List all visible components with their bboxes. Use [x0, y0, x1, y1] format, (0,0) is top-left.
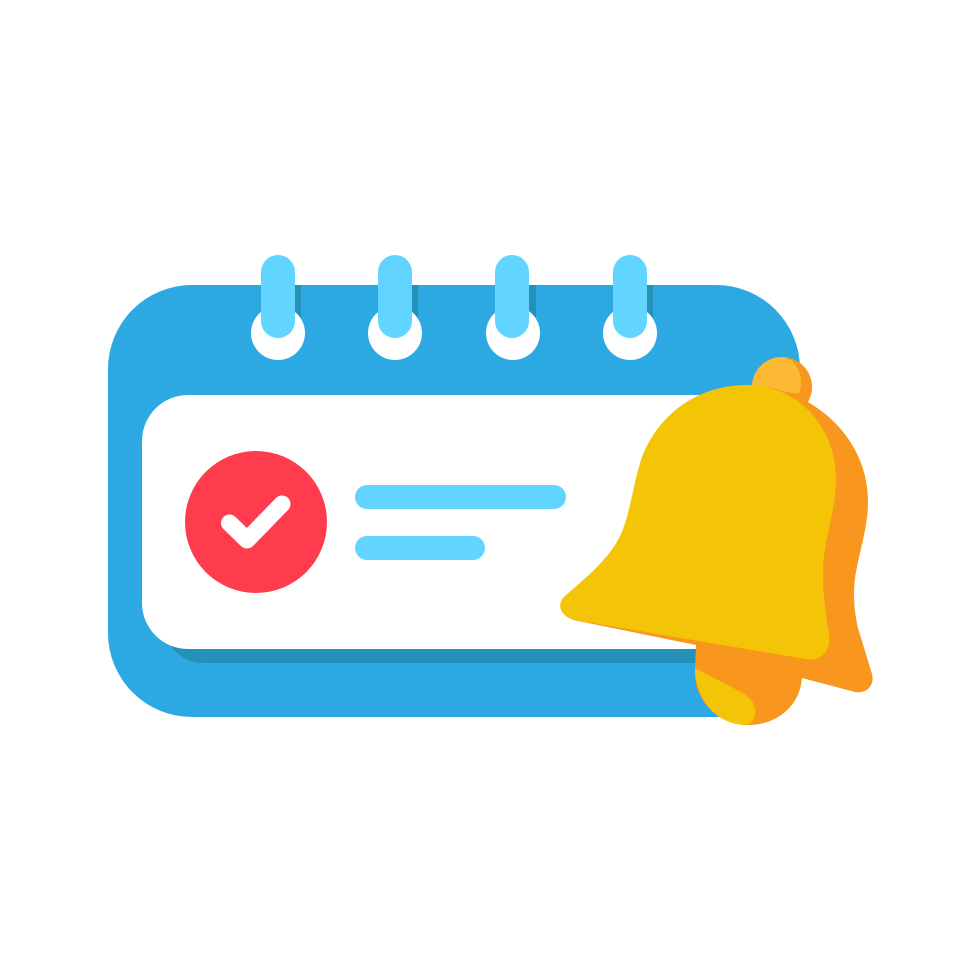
- bell clapper highlight: [695, 668, 755, 725]
- icon: notification bell: [560, 357, 873, 725]
- white reminder card: [142, 395, 782, 649]
- spiral binding rings: [251, 255, 657, 360]
- bell knob: [752, 357, 812, 417]
- calendar: [108, 255, 800, 717]
- text placeholder lines: [355, 485, 566, 560]
- card shadow: [167, 640, 730, 663]
- calendar body: [108, 285, 800, 717]
- icon: red check badge: [185, 451, 327, 593]
- bell front: [560, 385, 836, 659]
- bell back shade: [573, 387, 873, 725]
